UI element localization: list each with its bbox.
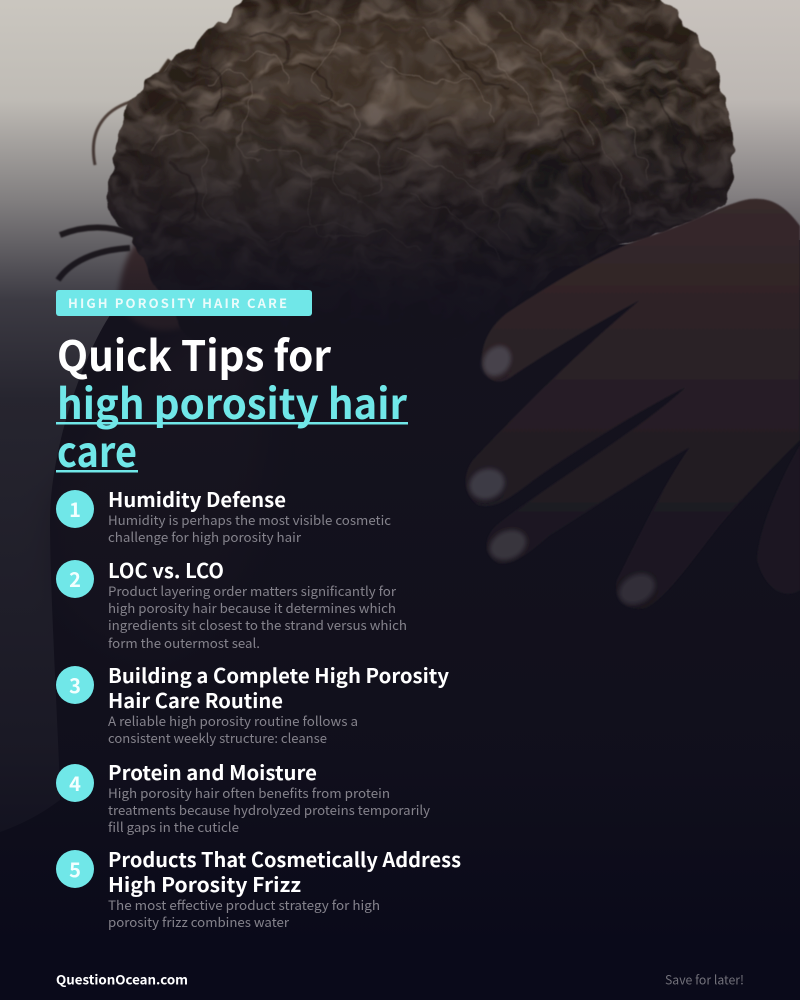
skin behind ear <box>118 222 197 330</box>
tip 2: LOC vs. LCO: Product layering order matters significantly for <box>108 581 397 600</box>
tip 1: humidity defense: challenge for high porosity hair <box>108 527 302 546</box>
icon: hand <box>465 199 800 611</box>
tip 1: humidity defense: Humidity Defense <box>108 484 286 513</box>
neck and shoulder silhouette <box>0 230 800 1000</box>
tip 4: protein and moisture: Protein and Moisture <box>108 757 317 786</box>
tip 3: complete routine <box>56 660 450 747</box>
tip 2: LOC vs. LCO: 2 <box>69 564 81 593</box>
title: care <box>57 419 137 480</box>
tip 5: products for frizz: porosity frizz combines water <box>108 912 290 931</box>
tip 4: protein and moisture <box>56 757 430 836</box>
tip 5: products for frizz: Products That Cosmetically Address <box>108 844 461 873</box>
tip 2: LOC vs. LCO: form the outermost seal. <box>108 633 260 652</box>
title <box>56 323 408 480</box>
tip 3: complete routine: consistent weekly structure: cleanse <box>108 728 327 747</box>
tip 2: LOC vs. LCO: LOC vs. LCO <box>108 555 224 584</box>
tip 4: protein and moisture: treatments because hydrolyzed proteins temporarily <box>108 800 430 819</box>
tip 3: complete routine: A reliable high porosity routine follows a <box>108 711 358 730</box>
tip 2: LOC vs. LCO: high porosity hair because it determines which <box>108 598 396 617</box>
tip 2: LOC vs. LCO <box>56 555 407 652</box>
tip 5: products for frizz: 5 <box>69 854 81 883</box>
tip 4: protein and moisture: High porosity hair often benefits from protein <box>108 783 390 802</box>
tip 4: protein and moisture: 4 <box>69 768 81 797</box>
tip 2: LOC vs. LCO: ingredients sit closest to the strand versus which <box>108 615 407 634</box>
tip 3: complete routine: 3 <box>69 670 81 699</box>
icon: fingernails <box>465 340 660 611</box>
badge <box>56 290 312 316</box>
tip 4: protein and moisture: fill gaps in the cuticle <box>108 817 239 836</box>
tip 3: complete routine: Building a Complete High Porosity <box>108 660 450 689</box>
title: high porosity hair <box>57 371 408 432</box>
hair mass <box>106 0 736 327</box>
footer band <box>0 955 800 1000</box>
tip 1: humidity defense: 1 <box>69 494 81 523</box>
loose dark strands at left <box>58 60 170 280</box>
tip 1: humidity defense: Humidity is perhaps the most visible cosmetic <box>108 510 391 529</box>
tip 1: humidity defense <box>56 484 391 546</box>
tip 5: products for frizz: High Porosity Frizz <box>108 869 301 898</box>
footer brand: QuestionOcean.com <box>56 970 188 988</box>
tip 5: products for frizz: The most effective product strategy for high <box>108 895 380 914</box>
tip 5: products for frizz <box>56 844 461 931</box>
tip 3: complete routine: Hair Care Routine <box>108 685 283 714</box>
title: Quick Tips for <box>57 323 332 384</box>
badge: HIGH POROSITY HAIR CARE <box>68 293 287 312</box>
footer note: Save for later! <box>665 970 744 988</box>
